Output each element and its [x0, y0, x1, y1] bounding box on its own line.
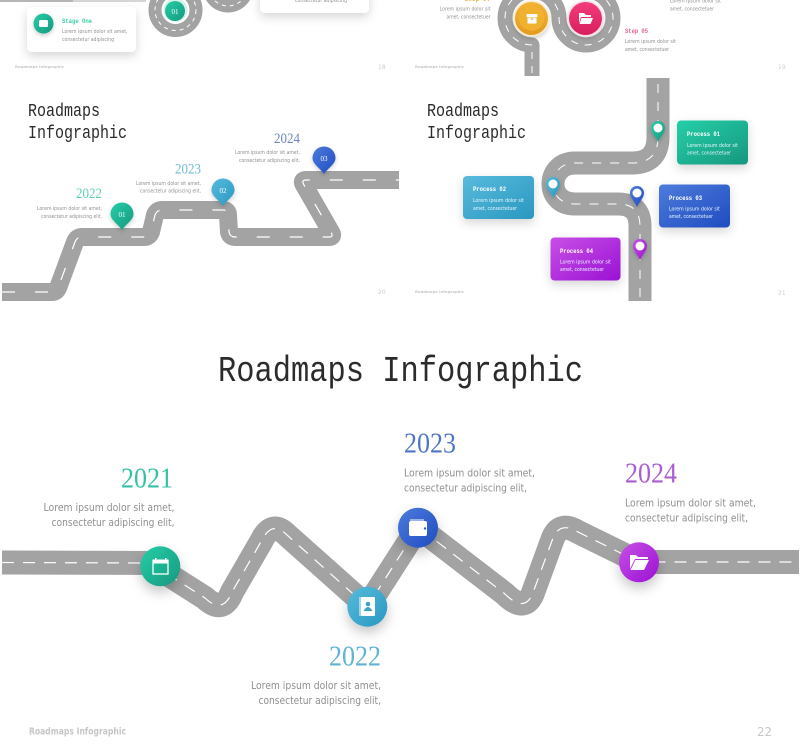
upper right step text: amet, consectetuer: [670, 6, 715, 12]
card: process 03: Process 03: [669, 195, 702, 202]
stepped road: [2, 180, 399, 292]
card: stage one: [27, 7, 136, 52]
label 2024: [625, 458, 756, 524]
slide 20 title: Infographic: [28, 124, 127, 144]
step 04 text: amet, consectetuer: [446, 14, 491, 20]
footer 19: [415, 64, 786, 71]
label 2022: consectetur adipiscing elit,: [41, 214, 102, 220]
footer 18: 18: [378, 64, 386, 71]
slide 21 title: Roadmaps: [427, 102, 499, 122]
label 2023: consectetur adipiscing elit,: [404, 482, 527, 494]
label 2023: [136, 162, 201, 194]
page number 22: 22: [757, 725, 772, 739]
step 04 text: Lorem ipsum dolor sit: [440, 6, 491, 12]
top road strip: [0, 0, 146, 2]
page number 20: 20: [378, 289, 386, 296]
footer 18: [15, 64, 386, 71]
card: stage one: consectetur adipiscing: [62, 37, 114, 43]
ring road 02: [209, 0, 247, 6]
card: process 01: Lorem ipsum dolor sit: [687, 143, 738, 149]
S-shaped road: [553, 78, 658, 301]
slide 22: main roadmap: [2, 351, 799, 739]
footer 19: 19: [778, 64, 786, 71]
pin 01: 01: [118, 211, 126, 219]
label 2021: consectetur adipiscing elit,: [52, 516, 174, 529]
ring road 01: 01: [172, 8, 179, 16]
slide 20 title: [28, 102, 127, 144]
label 2023: 2023: [404, 428, 456, 460]
slide 20 title: Roadmaps: [28, 102, 100, 122]
label 2021: Lorem ipsum dolor sit amet,: [44, 501, 174, 514]
step 05 text: Step 05: [625, 28, 648, 35]
label 2022: [37, 186, 102, 220]
label 2022: 2022: [329, 642, 381, 672]
card: process 01: amet, consectetuer: [687, 150, 732, 156]
step 05 text: amet, consectetuer: [625, 47, 670, 53]
card: process 03: [659, 184, 730, 228]
label 2022: 2022: [76, 186, 102, 202]
label 2021: 2021: [121, 464, 173, 494]
label 2022: [251, 642, 381, 707]
label 2024: consectetur adipiscing elit,: [239, 158, 300, 164]
pin 03: 03: [320, 155, 328, 163]
card: process 02: Process 02: [473, 186, 506, 193]
slide 19: steps roadmap: [415, 0, 786, 76]
label 2024: consectetur adipiscing elit,: [625, 512, 748, 524]
footer 19: Roadmaps Infographic: [415, 65, 464, 69]
slide 21 title: [427, 102, 526, 144]
main title: Roadmaps Infographic: [218, 351, 583, 392]
label 2024: 2024: [625, 458, 677, 490]
pin 02: [212, 178, 234, 206]
upper right step text: [670, 0, 721, 12]
label 2024: Lorem ipsum dolor sit amet,: [625, 496, 756, 510]
label 2024: 2024: [274, 131, 301, 147]
icon: box: [514, 0, 550, 36]
footer 22: Roadmaps Infographic: [29, 726, 126, 738]
card: process 03: Lorem ipsum dolor sit: [669, 206, 720, 212]
slide 20: timeline with pins: [2, 102, 399, 296]
card: process 04: amet, consectetuer: [560, 267, 605, 273]
label 2021: [44, 464, 174, 529]
label 2022: Lorem ipsum dolor sit amet,: [37, 206, 102, 212]
figure-eight road: [505, 0, 613, 76]
pin cyan: [546, 177, 560, 198]
pin 03: [312, 146, 336, 174]
card: process 04: Process 04: [560, 248, 593, 255]
footer 21: 21: [778, 290, 786, 297]
pin purple: [633, 239, 647, 260]
footer 21: Roadmaps Infographic: [415, 290, 464, 294]
label 2024: [235, 131, 301, 164]
icon: contact book node: [347, 587, 387, 627]
pin teal: [651, 121, 665, 142]
card: stage one: Lorem ipsum dolor sit amet,: [62, 29, 128, 35]
winding road: [2, 527, 799, 607]
icon: wallet node: [398, 508, 438, 548]
step 04 text: [440, 0, 491, 20]
ring road 01: [155, 0, 196, 30]
pin 01: [110, 202, 134, 230]
card: process 04: [550, 238, 620, 280]
card: process 02: amet, consectetuer: [473, 206, 518, 212]
label 2024: Lorem ipsum dolor sit amet,: [235, 150, 300, 156]
label 2023: 2023: [175, 162, 201, 178]
card: upper right: [260, 0, 369, 13]
label 2023: consectetur adipiscing elit,: [140, 188, 201, 194]
footer 21: [415, 290, 786, 297]
step 05 text: [625, 28, 676, 53]
slide 21: process road: [415, 78, 786, 301]
card: process 02: [463, 176, 534, 219]
icon: folder node: [619, 542, 659, 582]
icon: folder: [568, 0, 604, 36]
pin 02: 02: [220, 187, 227, 195]
slide 18: stages roadmap: [0, 0, 386, 71]
card: process 04: Lorem ipsum dolor sit: [560, 260, 611, 266]
step 05 text: Lorem ipsum dolor sit: [625, 39, 676, 45]
label 2023: Lorem ipsum dolor sit amet,: [404, 466, 535, 480]
label 2022: Lorem ipsum dolor sit amet,: [251, 679, 381, 692]
footer 18: Roadmaps Infographic: [15, 65, 64, 69]
label 2023: Lorem ipsum dolor sit amet,: [136, 181, 201, 187]
icon: calendar node: [140, 546, 180, 586]
card: process 03: amet, consectetuer: [669, 214, 714, 220]
card: process 01: Process 01: [687, 131, 720, 138]
pin blue: [630, 186, 644, 207]
label 2022: consectetur adipiscing elit,: [258, 694, 381, 707]
label 2023: [404, 428, 535, 494]
card: stage one: Stage One: [62, 18, 92, 25]
slide 21 title: Infographic: [427, 124, 526, 144]
card: process 01: [677, 120, 748, 164]
card: process 02: Lorem ipsum dolor sit: [473, 198, 524, 204]
